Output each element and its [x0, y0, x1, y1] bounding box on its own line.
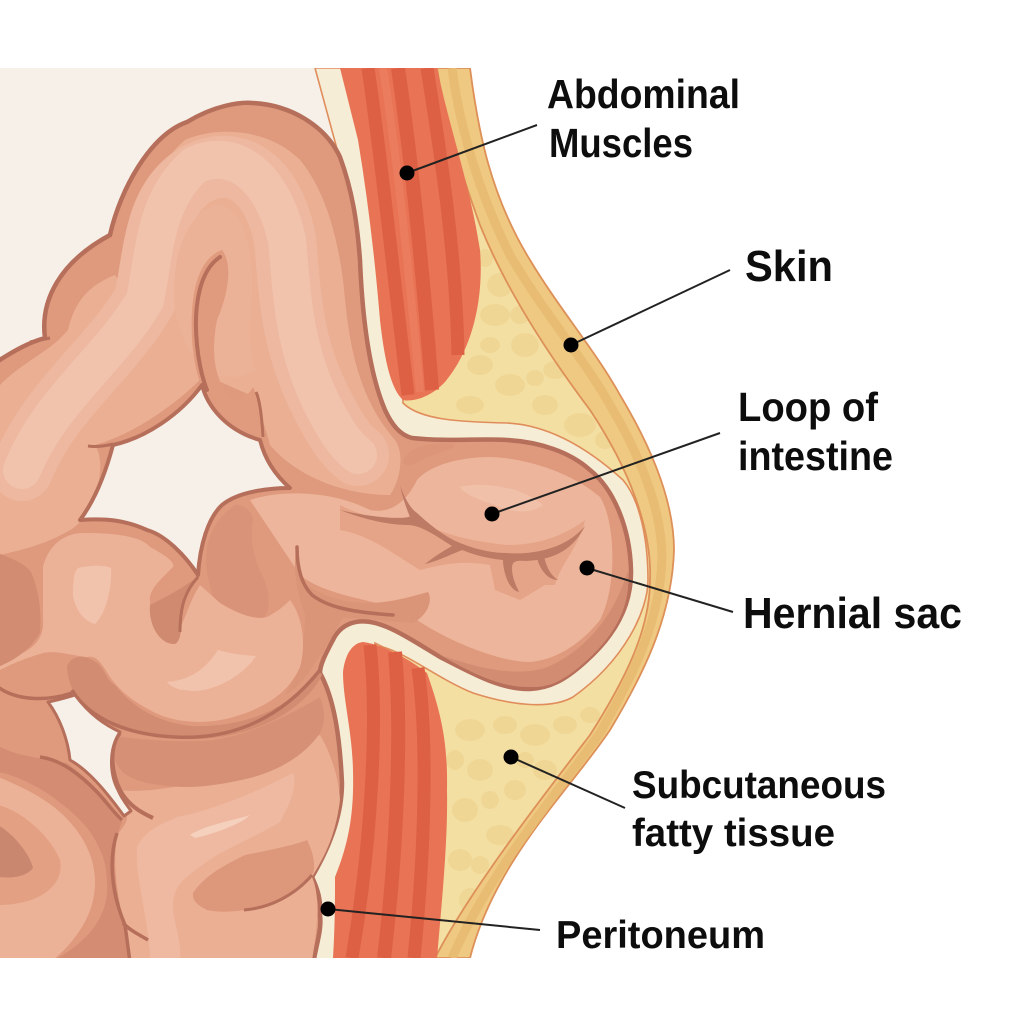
label: Abdominal Muscles: [547, 71, 740, 166]
middle loop highlights: [73, 566, 111, 624]
label: Subcutaneous fatty tissue: [632, 764, 886, 855]
label: Loop of intestine: intestine: [738, 433, 893, 479]
hernial sac lower rim: [440, 570, 628, 687]
intestine loops: [0, 103, 631, 965]
leader: Peritoneum: [320, 902, 540, 930]
upper loop mid band: [22, 167, 358, 470]
lower right loop body: [115, 735, 340, 960]
lower abdominal muscle: [333, 642, 447, 958]
subcutaneous fat layer: [376, 198, 650, 951]
label: Skin: Skin: [745, 242, 833, 291]
inner peak tone: [174, 205, 255, 377]
leader: Loop of intestine: [484, 433, 720, 522]
label: Loop of intestine: Loop of: [738, 384, 878, 430]
hernial sac top shadow: [403, 443, 455, 466]
skin layer: [435, 68, 674, 958]
lower loop S-fold: [193, 840, 314, 912]
label: Loop of intestine: [738, 384, 893, 479]
anatomical illustration: [0, 68, 674, 970]
label: Abdominal Muscles: Abdominal: [547, 71, 740, 117]
label: Subcutaneous fatty tissue: fatty tissue: [632, 812, 835, 855]
lower loop top shadow: [115, 697, 324, 787]
label: Abdominal Muscles: Muscles: [549, 120, 693, 166]
left middle loop shadow: [0, 553, 41, 667]
lower loop highlights: [137, 773, 294, 960]
upper loop body: [0, 132, 400, 555]
dark band under middle loop: [67, 657, 322, 739]
fold halo: [340, 505, 585, 600]
bottom left coil: [0, 745, 148, 962]
lower loop left outline: [112, 733, 153, 818]
fold inside upper loop: [192, 250, 259, 410]
upper abdominal muscle: [340, 68, 481, 400]
mesentery fold lines: [340, 485, 585, 592]
leader: Skin: [564, 270, 730, 352]
label: Subcutaneous fatty tissue: Subcutaneous: [632, 764, 886, 807]
crease lines: [30, 338, 263, 446]
hernial sac highlight: [460, 485, 543, 511]
middle loop dark rim: [206, 505, 269, 620]
left middle loop body: [0, 533, 303, 722]
upper loop highlight: [22, 160, 358, 470]
intestine silhouette: [0, 103, 631, 965]
label: Peritoneum: Peritoneum: [556, 914, 765, 957]
abdominal cavity background: [0, 68, 334, 357]
leader: Abdominal Muscles: [400, 125, 537, 180]
notch folds: [150, 580, 194, 644]
label: Hernial sac: Hernial sac: [743, 589, 962, 638]
leader: Subcutaneous fatty tissue: [504, 750, 625, 808]
upper space between loops: [80, 385, 290, 575]
lower space between loops: [48, 695, 131, 816]
leader: Hernial sac: [580, 560, 733, 612]
hernial loop body: [250, 457, 612, 662]
middle loop body fold: [294, 556, 430, 620]
peritoneum lining: [300, 68, 648, 970]
